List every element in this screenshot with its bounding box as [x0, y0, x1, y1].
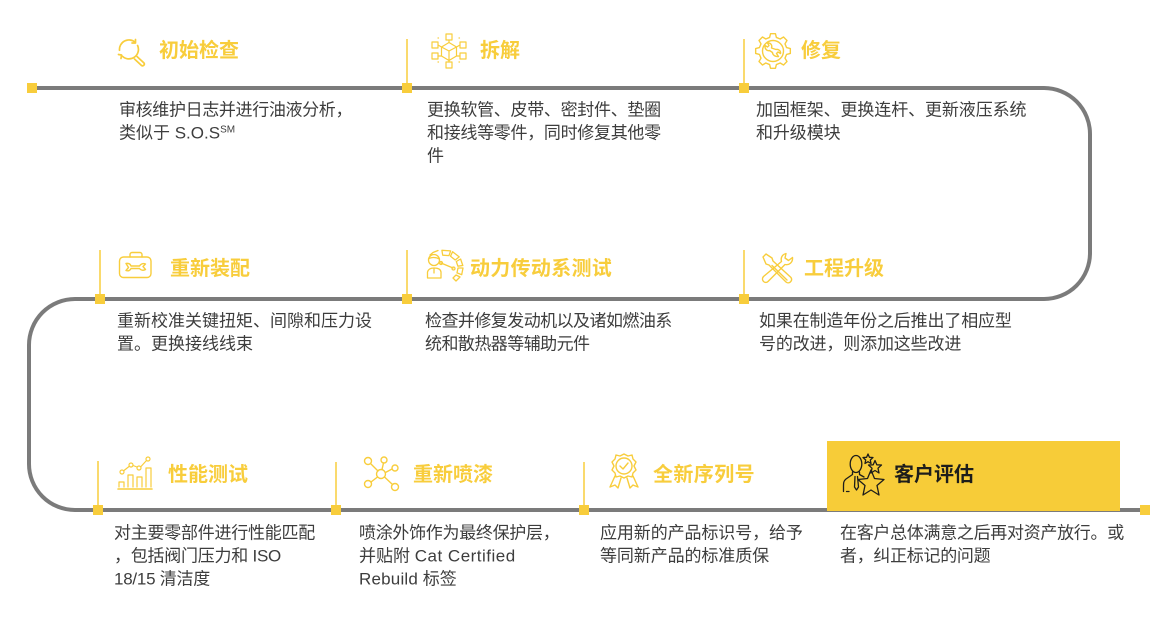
body 6: 如果在制造年份之后推出了相应型: [759, 312, 1012, 330]
icon: person with stars: [844, 454, 884, 495]
body 9: 等同新产品的标准质保: [600, 546, 769, 566]
marker 10: [1140, 505, 1150, 515]
icon: bar and line chart: [118, 457, 152, 489]
icon: toolbox: [120, 252, 151, 278]
highlighted banner: customer evaluation: [827, 441, 1120, 511]
body 1: [119, 100, 352, 142]
icon: node network: [364, 457, 398, 490]
body 3: 加固框架、更换连杆、更新液压系统: [756, 100, 1026, 120]
connector 8: [335, 462, 337, 510]
marker 3: [739, 83, 749, 93]
step 4: reassembly: [95, 250, 372, 354]
connector 6: [743, 250, 745, 299]
step 7: performance test: [93, 457, 315, 588]
heading 4: 重新装配: [170, 257, 250, 280]
step 1: initial inspection: [27, 38, 352, 142]
step 6: engineering upgrade: [739, 250, 1012, 354]
body 1: 审核维护日志并进行油液分析，: [119, 100, 352, 120]
step 9: new serial number: [579, 454, 803, 566]
heading 2: 拆解: [480, 39, 520, 62]
connector 3: [743, 39, 745, 88]
step 5: powertrain test: [402, 250, 672, 354]
body 4: 重新校准关键扭矩、间隙和压力设: [117, 312, 372, 330]
step 8: repaint: [331, 457, 559, 588]
body 7: 18/15 清洁度: [114, 570, 210, 588]
body 1: 类似于 S.O.S: [119, 124, 220, 142]
body 10: [840, 524, 1124, 566]
body 2: 更换软管、皮带、密封件、垫圈: [427, 100, 661, 120]
body 7: ，包括阀门压力和 ISO: [114, 546, 281, 566]
marker 1: [27, 83, 37, 93]
connector 2: [406, 39, 408, 88]
heading 8: 重新喷漆: [413, 463, 493, 486]
body 5: 检查并修复发动机以及诸如燃油系: [425, 312, 672, 330]
icon: magnifier: [118, 40, 144, 66]
body 10: 者，纠正标记的问题: [840, 546, 991, 566]
body 5: [425, 312, 672, 354]
icon: cube network: [432, 34, 466, 68]
body 9: 应用新的产品标识号，给予: [600, 524, 803, 542]
connector 9: [583, 462, 585, 510]
body 6: [759, 312, 1012, 354]
body 7: 对主要零部件进行性能匹配: [114, 524, 315, 542]
step 10: customer evaluation: [840, 454, 1150, 566]
heading 7: 性能测试: [168, 463, 248, 486]
body 8: 喷涂外饰作为最终保护层，: [359, 524, 559, 542]
connector 4: [99, 250, 101, 299]
body 3: [756, 100, 1026, 142]
heading 3: 修复: [801, 39, 841, 62]
heading 5: 动力传动系测试: [470, 257, 612, 280]
body 2: 件: [427, 146, 444, 166]
body 9: [600, 524, 803, 566]
body 2: 和接线等零件，同时修复其他零: [427, 124, 661, 142]
heading 1: 初始检查: [159, 38, 239, 62]
icon: award ribbon: [610, 454, 638, 488]
marker 9: [579, 505, 589, 515]
marker 5: [402, 294, 412, 304]
icon: gauge and technician: [428, 250, 463, 281]
marker 7: [93, 505, 103, 515]
marker 4: [95, 294, 105, 304]
body 6: 号的改进，则添加这些改进: [759, 334, 961, 354]
connector 7: [97, 461, 99, 510]
body 2: [427, 100, 661, 166]
connector 5: [406, 250, 408, 299]
step 3: repair: [739, 34, 1026, 142]
heading 6: 工程升级: [804, 257, 884, 280]
marker 6: [739, 294, 749, 304]
icon: gear with wrench: [756, 34, 790, 68]
icon: crossed tools: [763, 254, 793, 283]
body 8: Rebuild 标签: [359, 570, 457, 588]
heading 10: 客户评估: [894, 462, 974, 486]
body 7: [114, 524, 315, 588]
marker 2: [402, 83, 412, 93]
body 5: 统和散热器等辅助元件: [425, 334, 590, 354]
body 3: 和升级模块: [756, 124, 841, 142]
body 4: [117, 312, 372, 354]
body 8: 并贴附 Cat Certified: [359, 546, 516, 566]
serpentine timeline path: [29, 88, 1145, 510]
body 4: 置。更换接线线束: [117, 334, 253, 354]
body 10: 在客户总体满意之后再对资产放行。或: [840, 524, 1124, 542]
heading 9: 全新序列号: [653, 462, 755, 486]
body 8: [359, 524, 559, 588]
marker 8: [331, 505, 341, 515]
body 1: SM: [220, 124, 235, 136]
step 2: disassembly: [402, 34, 661, 166]
